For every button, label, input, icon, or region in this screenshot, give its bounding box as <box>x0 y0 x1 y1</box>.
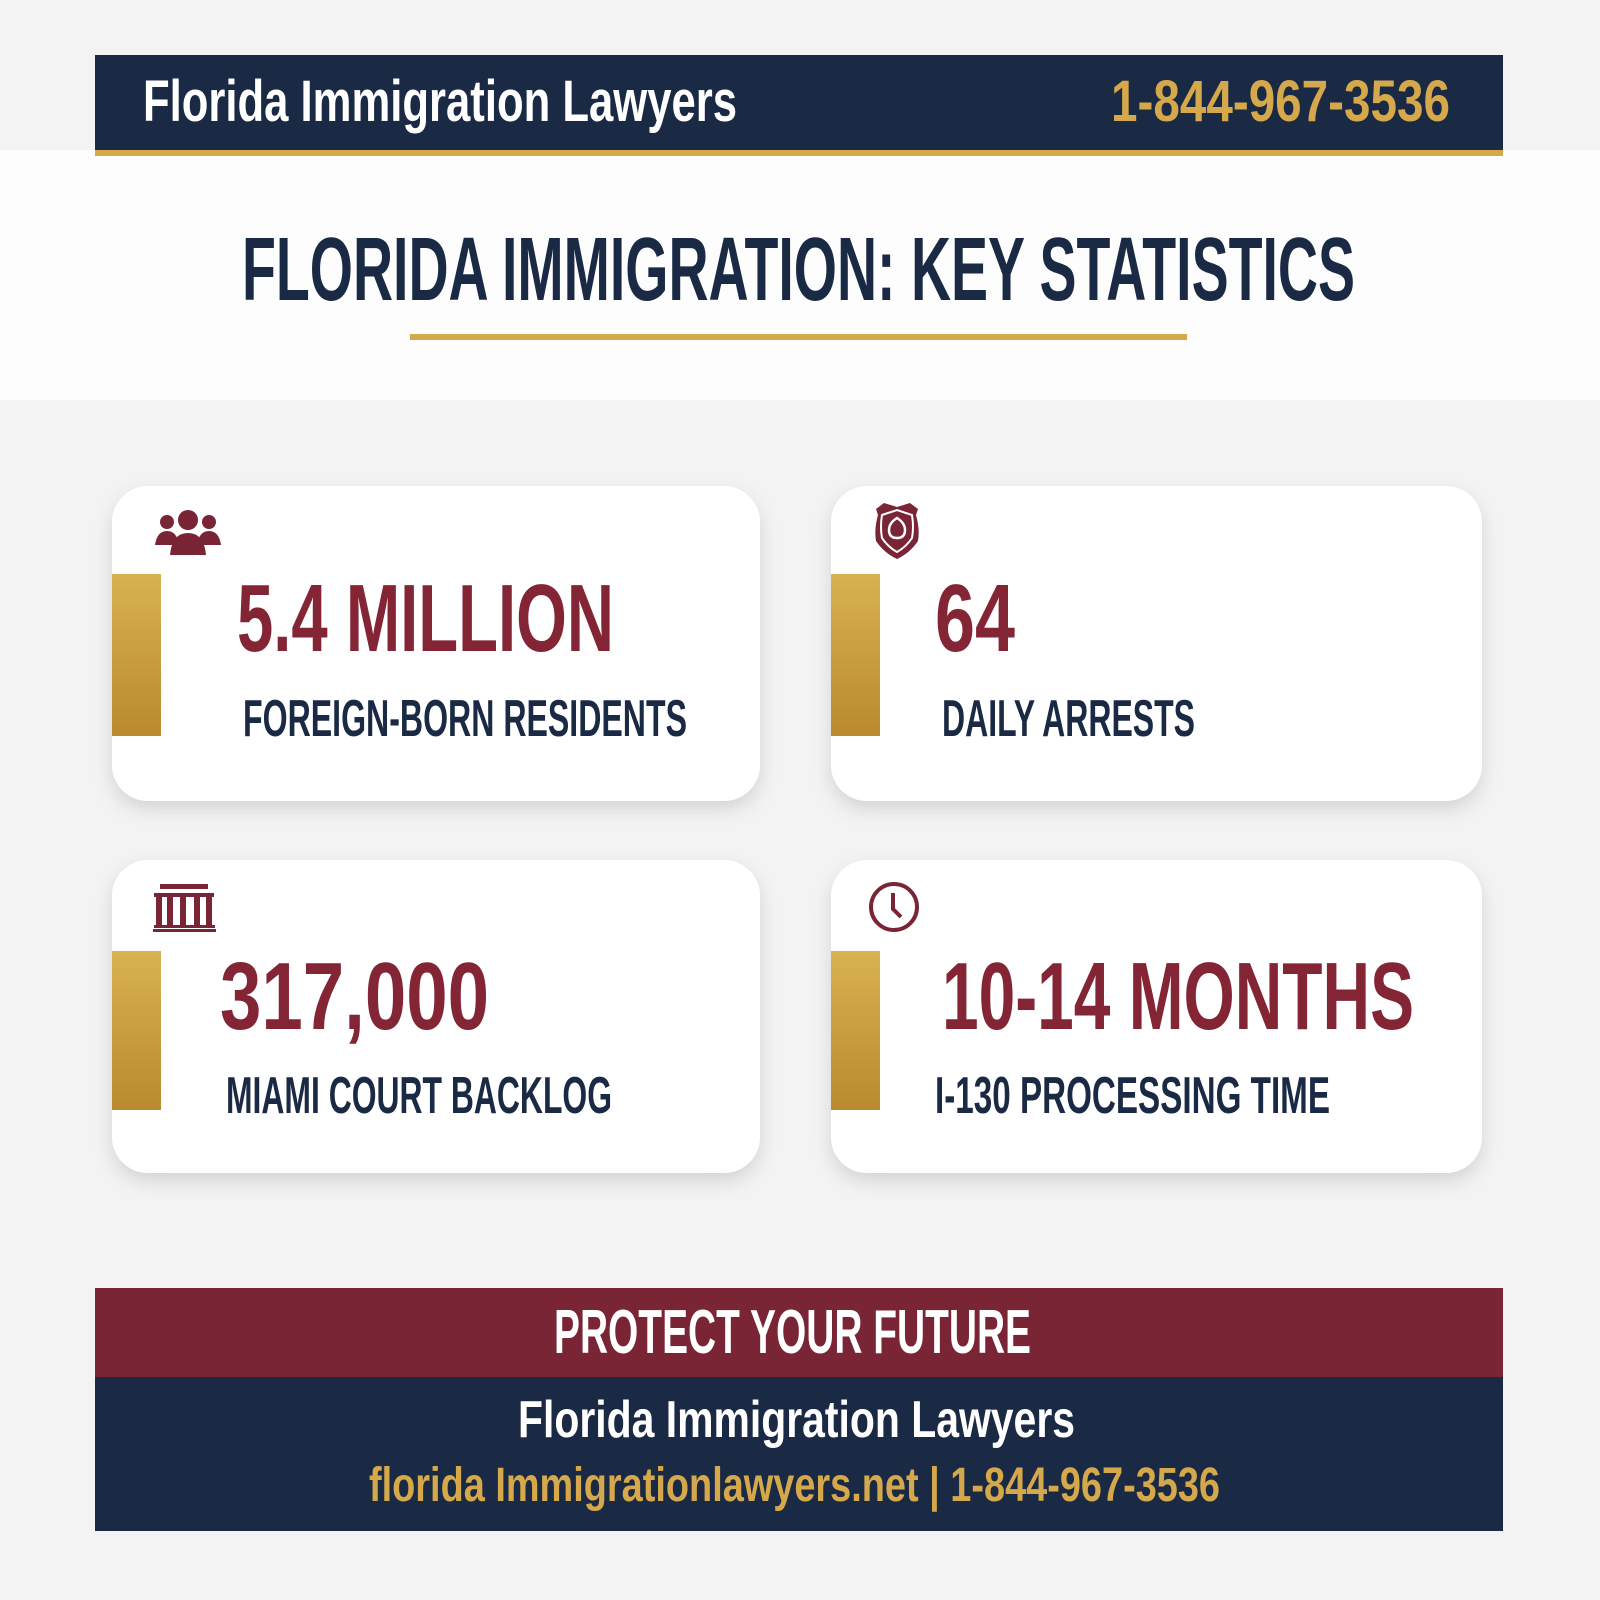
footer contact: florida Immigrationlawyers.net | 1-844-967-3536 <box>369 1459 1220 1512</box>
footer: PROTECT YOUR FUTURE <box>554 1298 1031 1367</box>
stat label: DAILY ARRESTS <box>942 690 1195 748</box>
stat number: 5.4 MILLION <box>237 565 614 672</box>
stat number: 317,000 <box>220 943 489 1050</box>
icon: shield <box>875 503 919 559</box>
stat label: FOREIGN-BORN RESIDENTS <box>243 690 687 748</box>
icon: people <box>155 510 221 555</box>
footer firm name: Florida Immigration Lawyers <box>518 1391 1075 1449</box>
icon: clock <box>871 884 917 930</box>
title underline <box>410 334 1187 340</box>
stat label: MIAMI COURT BACKLOG <box>226 1067 612 1125</box>
header bar <box>95 55 1503 156</box>
stat label: I-130 PROCESSING TIME <box>935 1067 1330 1125</box>
card: I-130 processing time <box>831 860 1482 1173</box>
footer banner <box>95 1288 1503 1377</box>
card: miami court backlog <box>112 860 760 1173</box>
header phone: 1-844-967-3536 <box>1111 69 1450 134</box>
card: daily arrests <box>831 486 1482 801</box>
header firm name: Florida Immigration Lawyers <box>143 69 737 134</box>
stat number: 64 <box>935 565 1015 672</box>
icon: courthouse <box>153 884 216 932</box>
card: foreign-born residents <box>112 486 760 801</box>
footer <box>95 1288 1503 1531</box>
